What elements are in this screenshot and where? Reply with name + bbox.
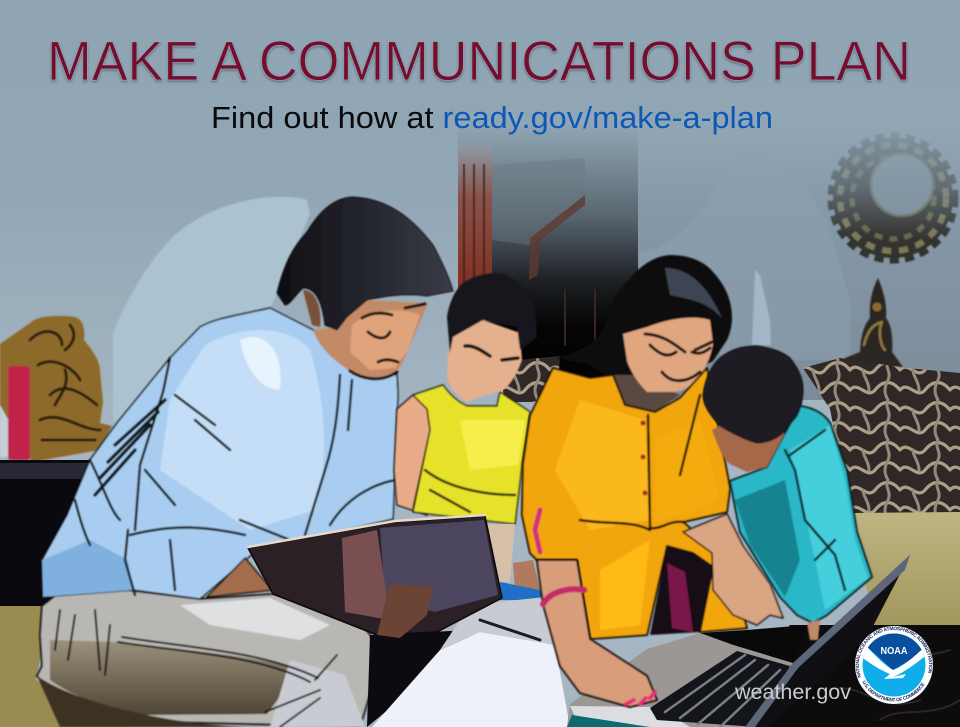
lit wall patch left [113,197,310,425]
title: MAKE A COMMUNICATIONS PLAN [47,29,911,92]
girl [394,273,537,524]
woman face [623,318,713,392]
man [37,197,453,727]
man shirt [42,308,398,599]
boy hair [703,346,803,443]
lit wall patch right [640,150,850,360]
dark table left [0,460,92,606]
woman collar [613,375,680,412]
weather.gov label: weather.gov [734,681,852,704]
statue left [0,316,112,462]
woman right arm [683,514,783,625]
boy face [712,426,785,472]
sofa back centre [498,356,560,402]
logo ring text top: NATIONAL OCEANIC AND ATMOSPHERIC ADMINISTRATION [856,626,932,678]
floor rug right [853,512,960,625]
man face [303,290,428,379]
decorative round mirror [832,137,954,259]
subtitle: Find out how at ready.gov/make-a-plan [211,101,773,135]
man trousers [37,590,374,727]
man hair [277,197,453,330]
logo ring text bottom: U.S. DEPARTMENT OF COMMERCE [862,680,924,702]
woman left arm and hand [537,560,657,707]
woman hair [557,255,732,400]
NOAA wordmark: NOAA [880,645,908,657]
NOAA logo [855,626,933,704]
book held by man [248,515,502,638]
laptop [567,555,910,727]
boy hand [807,620,820,640]
dark area under book [367,630,470,727]
woman [522,255,783,639]
man forearm [207,558,272,597]
girl hair [447,273,537,353]
man hand [377,584,433,638]
buddha statue [842,278,903,367]
floor rug left [0,606,130,727]
boy shirt [730,406,872,623]
dark gap behind laptop [700,625,807,663]
boy [703,346,872,640]
table dark right [720,625,960,727]
dark door frame [458,125,638,385]
girl face [447,320,522,402]
girl dress [413,385,530,524]
wall highlight sliver [752,270,771,345]
girl arm [394,395,430,515]
sofa back right [803,358,960,513]
woman skirt gap [650,546,713,635]
white papers on floor [372,597,570,727]
woman kurta [522,368,747,639]
skirt and cloth under girl [487,524,548,600]
